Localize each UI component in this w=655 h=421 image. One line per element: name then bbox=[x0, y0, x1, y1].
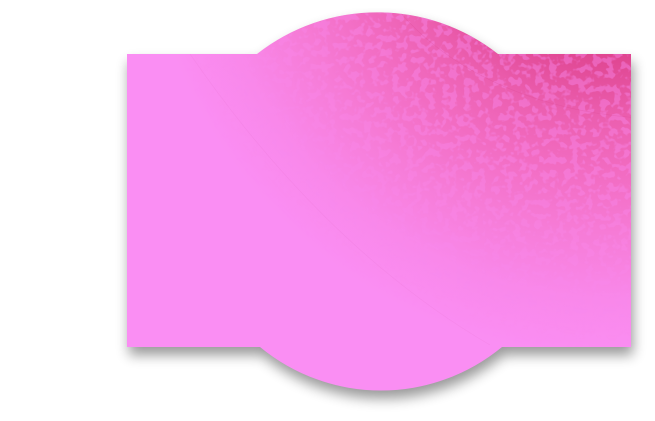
mottled texture bbox=[304, 12, 631, 228]
faint contour line, outer bbox=[190, 54, 490, 345]
badge drop shadow bbox=[129, 20, 633, 399]
badge: rectangle and ellipse union with gradient bbox=[127, 10, 640, 392]
gradient fill bbox=[127, 10, 631, 392]
faint contour line, inner bbox=[400, 12, 640, 118]
